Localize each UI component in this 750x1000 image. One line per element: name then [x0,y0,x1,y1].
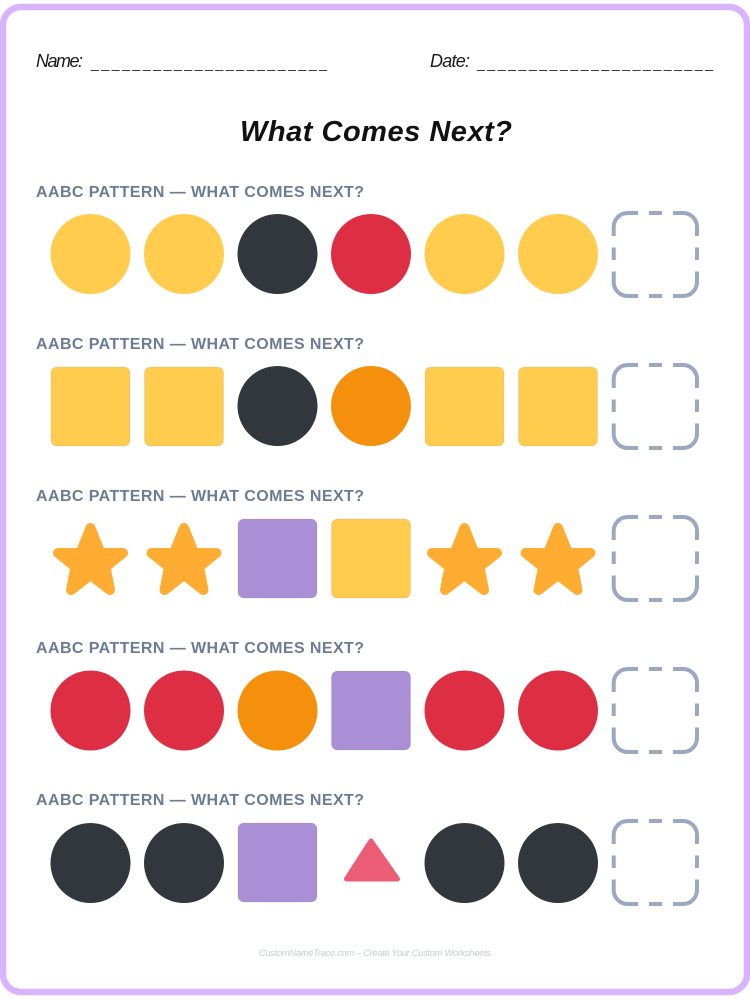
row 1 answer box [614,213,697,296]
row 2 label: AABC PATTERN — WHAT COMES NEXT? [36,336,364,353]
date field [430,51,713,71]
name field [36,51,327,71]
title: What Comes Next? [240,116,512,148]
row 2 answer box [614,365,697,448]
row 2 shapes [51,366,598,446]
row 5 answer box [614,821,697,904]
name field: _______________________ [90,55,327,71]
row 4 shapes [50,670,598,750]
row 4 answer box [614,669,697,752]
row 1 shapes [50,214,598,294]
row 3 label: AABC PATTERN — WHAT COMES NEXT? [36,488,364,505]
date field: Date: [430,51,470,71]
row 4 label: AABC PATTERN — WHAT COMES NEXT? [36,640,364,657]
footer: CustomNameTrace.com – Create Your Custom Worksheets [259,948,491,959]
row 1 label: AABC PATTERN — WHAT COMES NEXT? [36,184,364,201]
row 3 shapes [58,519,590,598]
row 5 label: AABC PATTERN — WHAT COMES NEXT? [36,792,364,809]
row 5 shapes [50,823,598,903]
date field: _______________________ [476,55,713,71]
name field: Name: [36,51,83,71]
row 3 answer box [614,517,697,600]
